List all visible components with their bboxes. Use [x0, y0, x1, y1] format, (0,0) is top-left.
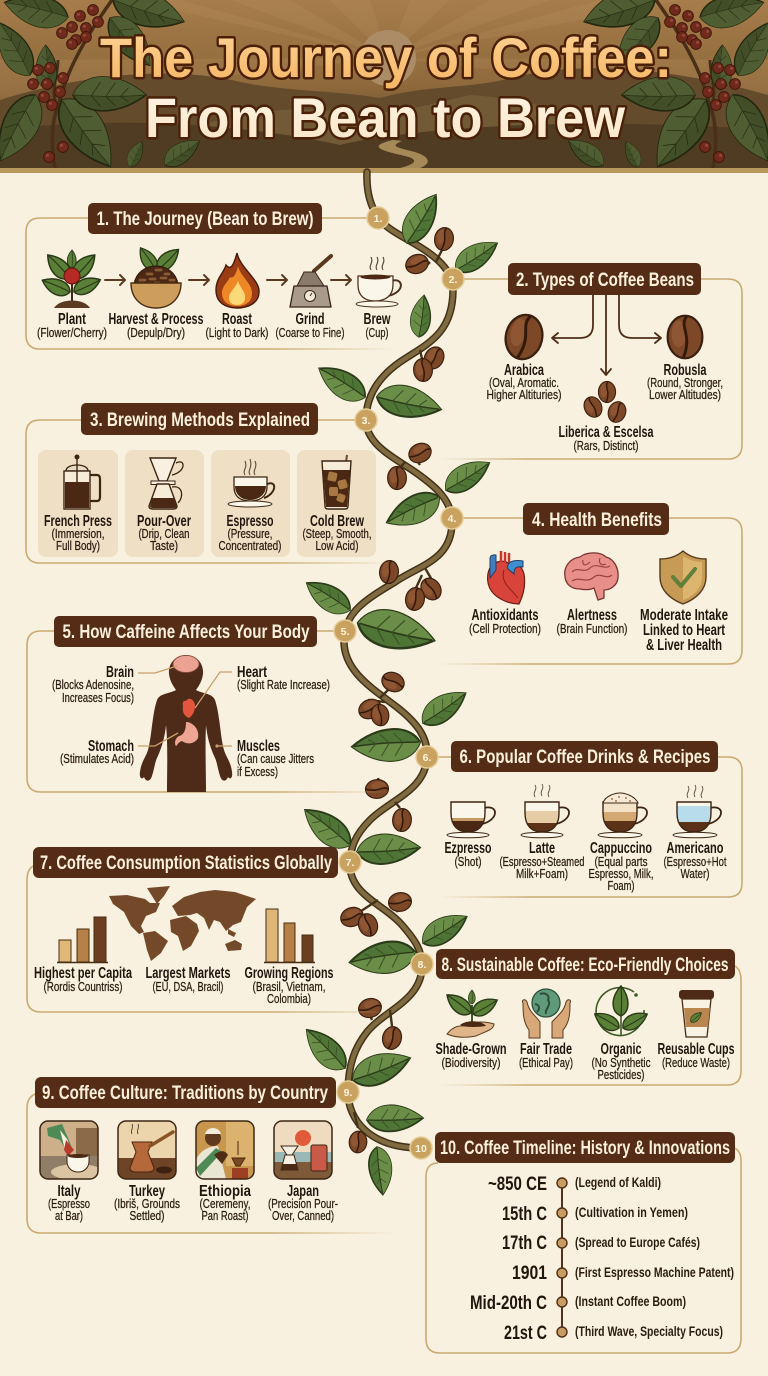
drink labels: Milk+Foam) — [516, 867, 568, 881]
heading: section 4 — [523, 503, 669, 535]
timeline dates: 1901 — [512, 1263, 547, 1284]
benefit labels: & Liver Health — [646, 637, 722, 654]
timeline events: (Third Wave, Specialty Focus) — [575, 1323, 723, 1339]
callout: muscles: if Excess) — [237, 765, 278, 779]
world map — [109, 886, 256, 961]
tile: Japan: Japan — [287, 1183, 319, 1200]
heading: section 7: 7. Coffee Consumption Statistics Globally — [40, 852, 332, 874]
callout: brain: (Blocks Adenosine, — [52, 678, 134, 692]
statistic labels: (EU, DSA, Bracil) — [152, 980, 224, 994]
eco labels: (No Synthetic — [592, 1056, 650, 1070]
tile: Ethiopia — [196, 1121, 254, 1223]
numbered vine nodes: 4. — [448, 513, 456, 525]
benefit labels: Moderate Intake — [640, 607, 728, 624]
icon: cappuccino cup — [598, 793, 647, 838]
arrows to bean types — [552, 295, 661, 375]
numbered vine nodes: 10 — [415, 1143, 427, 1155]
eco labels: Organic — [600, 1041, 642, 1058]
stage labels: Brew — [364, 311, 391, 328]
human body diagram — [138, 655, 232, 792]
callout: heart: Heart — [237, 664, 267, 681]
numbered vine nodes — [334, 207, 464, 1159]
benefit labels: Alertness — [567, 607, 617, 624]
heading: section 6 — [451, 741, 718, 772]
numbered vine nodes: 7. — [346, 857, 354, 869]
stage labels: Plant — [58, 311, 86, 328]
numbered vine nodes: 6. — [423, 752, 431, 764]
card: Pour-Over: (Drip, Clean — [138, 527, 190, 541]
numbered vine nodes: 5. — [341, 626, 349, 638]
card: Pour-Over: Pour-Over — [137, 513, 191, 530]
bean labels: Robusla — [664, 362, 707, 379]
eco labels — [436, 1041, 734, 1082]
callout: stomach — [60, 738, 134, 766]
stage labels: (Depulp/Dry) — [127, 326, 185, 340]
statistic labels: Growing Regions — [244, 965, 334, 982]
callout: brain: Increases Focus) — [62, 691, 134, 705]
heading: section 1 — [88, 203, 322, 234]
tile: Ethiopia: (Ceremeny, — [200, 1197, 250, 1211]
panel: 4. Health Benefits — [440, 503, 742, 664]
benefit labels: Antioxidants — [472, 607, 538, 624]
title line 2: From Bean to Brew — [145, 86, 625, 149]
card: French Press — [38, 450, 118, 557]
panel: 10. Coffee Timeline — [426, 1132, 741, 1353]
numbered vine nodes: 1. — [374, 213, 382, 225]
heading: section 5: 5. How Caffeine Affects Your Body — [62, 621, 310, 643]
drink labels: Water) — [680, 867, 710, 881]
drink labels: (Espresso+Hot — [664, 855, 727, 869]
tile: Turkey: (Ibriš, Grounds — [114, 1197, 180, 1211]
callout: muscles — [237, 738, 314, 779]
bean labels: Liberica & Escelsa — [558, 424, 654, 441]
heading: section 2 — [508, 263, 701, 295]
numbered vine nodes: 3. — [362, 415, 370, 427]
tile: Italy — [40, 1121, 103, 1223]
card: Espresso — [211, 450, 290, 557]
icon: plant — [39, 250, 103, 308]
heading: section 2: 2. Types of Coffee Beans — [516, 269, 694, 291]
timeline events: (Spread to Europe Cafés) — [575, 1234, 700, 1250]
tile: Turkey: Settled) — [130, 1209, 164, 1223]
heading: section 1: 1. The Journey (Bean to Brew) — [96, 208, 314, 230]
timeline dates: ~850 CE — [488, 1174, 547, 1195]
panel: 1. The Journey — [26, 203, 401, 349]
drink labels — [444, 840, 727, 893]
icon: espresso cup — [447, 802, 495, 838]
panel: 6. Popular Drinks — [427, 741, 742, 897]
heading: section 3 — [81, 403, 318, 435]
coffee vine with leaves and beans — [296, 172, 503, 1196]
statistic labels — [34, 965, 334, 1006]
timeline dates: 15th C — [502, 1204, 547, 1225]
numbered vine nodes: 2. — [449, 274, 457, 286]
card: Espresso: Espresso — [226, 513, 274, 530]
bean labels: (Round, Stronger, — [647, 376, 723, 390]
heading: section 4: 4. Health Benefits — [532, 509, 662, 531]
heading: section 7 — [33, 847, 338, 878]
tile: Italy: Italy — [58, 1183, 81, 1200]
statistic labels: Colombia) — [267, 992, 311, 1006]
timeline axis and markers — [557, 1178, 567, 1337]
benefit labels: Linked to Heart — [643, 622, 725, 639]
card: Pour-Over — [125, 450, 204, 557]
tile: Ethiopia: Ethiopia — [199, 1183, 251, 1200]
card: French Press: Full Body) — [56, 539, 100, 553]
arrows between stages — [105, 275, 351, 285]
icon: reusable cup — [679, 990, 714, 1037]
icon: arabica bean — [501, 311, 547, 363]
panel: 7. Consumption statistics — [27, 847, 395, 1012]
card: Espresso: Concentrated) — [218, 539, 282, 553]
timeline events — [575, 1174, 734, 1339]
stage labels: (Coarse to Fine) — [276, 326, 344, 340]
bean labels: (Oval, Aromatic. — [489, 376, 559, 390]
stage labels: Roast — [222, 311, 252, 328]
panel: 3. Brewing Methods — [26, 403, 395, 563]
statistic labels: (Rordis Countriss) — [44, 980, 122, 994]
icon: brain — [565, 553, 618, 600]
callout: muscles: Muscles — [237, 738, 280, 755]
panel: 2. Types of Coffee Beans — [440, 263, 742, 459]
drink labels: Latte — [529, 840, 555, 857]
drink labels: Americano — [666, 840, 724, 857]
stage labels: Harvest & Process — [108, 311, 204, 328]
bar chart: growing regions — [264, 909, 315, 962]
stage labels: (Cup) — [366, 326, 388, 340]
drink labels: Ezpresso — [444, 840, 492, 857]
eco labels: Fair Trade — [520, 1041, 572, 1058]
heading: section 5 — [54, 616, 317, 647]
icon: harvest bowl — [131, 244, 183, 308]
icon: fair trade — [522, 989, 571, 1038]
tile: Ethiopia: Pan Roast) — [202, 1209, 248, 1223]
title line 1: The Journey of Coffee: — [100, 26, 672, 89]
panel: 9. Coffee Culture — [27, 1077, 395, 1233]
bean labels — [486, 362, 723, 453]
drink labels: (Shot) — [454, 855, 482, 869]
callout: heart — [237, 664, 330, 692]
bar chart: per capita — [57, 917, 108, 962]
bean labels: Higher Altituries) — [486, 388, 562, 402]
eco labels: Shade-Grown — [436, 1041, 506, 1058]
timeline dates: Mid-20th C — [470, 1293, 547, 1314]
drink labels: (Equal parts — [594, 855, 648, 869]
card: Cold Brew: Low Acid) — [316, 539, 358, 553]
callout: brain: Brain — [106, 664, 134, 681]
stage labels: (Flower/Cherry) — [37, 326, 107, 340]
tile: Italy: (Espresso — [48, 1197, 90, 1211]
card: Cold Brew: (Steep, Smooth, — [302, 527, 372, 541]
bean labels: Arabica — [504, 362, 544, 379]
tile: Turkey — [114, 1121, 180, 1223]
icon: shield — [660, 551, 706, 604]
icon: americano cup — [673, 785, 721, 838]
statistic labels: Largest Markets — [146, 965, 230, 982]
bean labels: Lower Altitudes) — [649, 388, 721, 402]
statistic labels: Highest per Capita — [34, 965, 132, 982]
drink labels: Cappuccino — [590, 840, 652, 857]
statistic labels: (Brasil, Vietnam, — [252, 980, 326, 994]
callout: muscles: (Can cause Jitters — [237, 752, 314, 766]
title banner — [0, 0, 768, 177]
icon: heart — [488, 551, 525, 604]
tile: Japan: Over, Canned) — [272, 1209, 334, 1223]
eco labels: (Reduce Waste) — [662, 1056, 730, 1070]
timeline events: (Instant Coffee Boom) — [575, 1293, 686, 1309]
callout: stomach: (Stimulates Acid) — [60, 752, 134, 766]
heading: section 3: 3. Brewing Methods Explained — [90, 409, 310, 431]
tile: Japan — [268, 1121, 338, 1223]
eco labels: (Ethical Pay) — [519, 1056, 573, 1070]
numbered vine nodes: 9. — [344, 1087, 352, 1099]
bean labels: (Rars, Distinct) — [574, 439, 638, 453]
timeline events: (Legend of Kaldi) — [575, 1174, 661, 1190]
stage labels — [37, 311, 391, 340]
icon: robusta bean — [668, 316, 702, 358]
callout: brain — [52, 664, 134, 705]
tile: Italy: at Bar) — [55, 1209, 83, 1223]
icon: grinder — [290, 256, 331, 307]
callout: stomach: Stomach — [88, 738, 134, 755]
stage labels: Grind — [296, 311, 324, 328]
heading: section 8 — [436, 949, 735, 979]
heading: section 9: 9. Coffee Culture: Traditions by Country — [42, 1082, 328, 1104]
card: Cold Brew — [297, 450, 376, 557]
icon: organic — [591, 986, 651, 1036]
drink labels: (Espresso+Steamed — [500, 855, 585, 869]
card: French Press: French Press — [44, 513, 112, 530]
card: Pour-Over: Taste) — [150, 539, 178, 553]
numbered vine nodes: 8. — [418, 959, 426, 971]
timeline events: (Cultivation in Yemen) — [575, 1204, 688, 1220]
heading: section 10 — [435, 1132, 735, 1163]
eco labels: Reusable Cups — [658, 1041, 734, 1058]
tile: Japan: (Precision Pour- — [268, 1197, 338, 1211]
card: Cold Brew: Cold Brew — [310, 513, 365, 530]
drink labels: Foam) — [608, 879, 634, 893]
eco labels: (Biodiversity) — [442, 1056, 500, 1070]
icon: roast flame — [216, 253, 259, 308]
timeline dates: 17th C — [502, 1233, 547, 1254]
panel: 8. Sustainable Coffee — [436, 949, 741, 1085]
icon: liberica beans — [581, 381, 629, 425]
card: Espresso: (Pressure, — [228, 527, 272, 541]
timeline dates: 21st C — [504, 1323, 547, 1344]
benefit labels — [469, 607, 728, 654]
benefit labels: (Brain Function) — [556, 622, 628, 636]
icon: brew cup — [356, 257, 401, 307]
stage labels: (Light to Dark) — [206, 326, 268, 340]
icon: latte cup — [521, 784, 569, 838]
heading: section 9 — [35, 1077, 336, 1108]
card: French Press: (Immersion, — [52, 527, 104, 541]
callout: heart: (Slight Rate Increase) — [237, 678, 330, 692]
icon: shade-grown — [442, 989, 501, 1037]
drink labels: Espresso, Milk, — [588, 867, 654, 881]
benefit labels: (Cell Protection) — [469, 622, 541, 636]
eco labels: Pesticides) — [598, 1068, 644, 1082]
timeline dates — [470, 1174, 547, 1344]
tile: Turkey: Turkey — [129, 1183, 165, 1200]
panel: 5. Caffeine and body — [27, 616, 395, 792]
